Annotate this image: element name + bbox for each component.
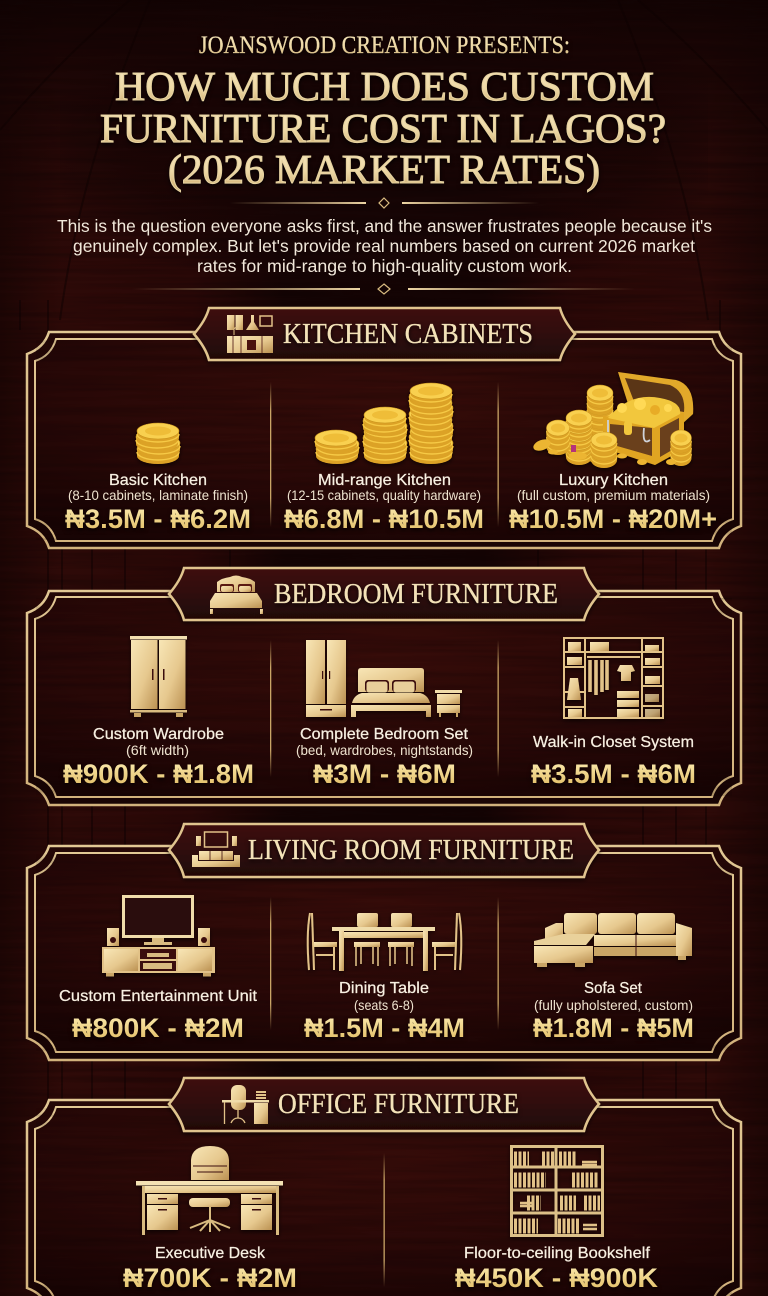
card: mid-range kitchen (284, 383, 484, 534)
intro paragraph: rates for mid-range to high-quality custom work. (197, 256, 572, 276)
card: custom wardrobe: Custom Wardrobe (93, 726, 224, 743)
icon: dining table (308, 913, 461, 971)
card: custom wardrobe (63, 636, 254, 789)
card: entertainment unit (59, 896, 258, 1043)
intro paragraph: genuinely complex. But let's provide real numbers based on current 2026 market (73, 236, 695, 256)
icon: closet (564, 638, 663, 718)
card: walk-in closet: Walk-in Closet System (533, 734, 694, 751)
icon: treasure chest (532, 372, 693, 468)
card: custom wardrobe: ₦900K - ₦1.8M (63, 759, 254, 789)
card: mid-range kitchen: ₦6.8M - ₦10.5M (284, 504, 484, 534)
icon: coin stacks (315, 383, 453, 464)
card: complete bedroom set: ₦3M - ₦6M (313, 759, 456, 789)
icon: office chair and desk (222, 1085, 269, 1124)
card: dining table: (seats 6-8) (354, 997, 414, 1013)
card: dining table: ₦1.5M - ₦4M (304, 1013, 465, 1043)
card: walk-in closet: ₦3.5M - ₦6M (531, 759, 696, 789)
card: luxury kitchen: ₦10.5M - ₦20M+ (509, 504, 717, 534)
icon: tv unit (102, 896, 215, 976)
card: complete bedroom set: Complete Bedroom Set (300, 726, 469, 743)
banner: living room furniture: LIVING ROOM FURNITURE (248, 835, 574, 866)
card: bookshelf: Floor-to-ceiling Bookshelf (464, 1245, 651, 1262)
card: bookshelf (455, 1146, 659, 1293)
icon: bed (210, 576, 263, 614)
banner: office furniture (169, 1078, 599, 1131)
icon: sofa and tv (192, 832, 240, 867)
icon: coins (136, 423, 180, 464)
card: complete bedroom set (296, 640, 473, 789)
card: entertainment unit: Custom Entertainment Unit (59, 988, 258, 1005)
title: FURNITURE COST IN LAGOS? (100, 105, 666, 151)
card: custom wardrobe: (6ft width) (126, 742, 189, 758)
icon: kitchen (227, 315, 273, 353)
title: HOW MUCH DOES CUSTOM (115, 63, 654, 109)
intro paragraph: This is the question everyone asks first, and the answer frustrates people because it's (57, 216, 712, 236)
header (57, 32, 712, 294)
card: sofa set (533, 913, 694, 1043)
card: executive desk (123, 1146, 297, 1293)
card: basic kitchen: ₦3.5M - ₦6.2M (65, 504, 251, 534)
card: executive desk: Executive Desk (155, 1245, 266, 1262)
icon: sectional sofa (534, 913, 692, 967)
card: complete bedroom set: (bed, wardrobes, nightstands) (296, 742, 473, 758)
icon: bedroom set (306, 640, 462, 717)
card: luxury kitchen: (full custom, premium materials) (517, 487, 710, 503)
card: luxury kitchen: Luxury Kitchen (559, 472, 668, 489)
card: mid-range kitchen: (12-15 cabinets, quality hardware) (287, 487, 481, 503)
card: basic kitchen: (8-10 cabinets, laminate finish) (68, 487, 248, 503)
panel: living room furniture (27, 824, 741, 1060)
card: bookshelf: ₦450K - ₦900K (455, 1263, 659, 1293)
banner: living room furniture (169, 824, 599, 877)
panel: office furniture (27, 1078, 741, 1296)
icon: executive desk (136, 1146, 283, 1235)
title: (2026 MARKET RATES) (168, 146, 600, 192)
presenter line: JOANSWOOD CREATION PRESENTS: (199, 32, 570, 59)
card: sofa set: (fully upholstered, custom) (534, 997, 693, 1013)
card: sofa set: ₦1.8M - ₦5M (533, 1013, 694, 1043)
card: executive desk: ₦700K - ₦2M (123, 1263, 297, 1293)
title (100, 63, 666, 192)
panel: bedroom furniture (27, 568, 741, 805)
banner: kitchen cabinets (194, 308, 575, 360)
panel: kitchen cabinets (27, 308, 741, 548)
card: dining table: Dining Table (339, 980, 429, 997)
card: dining table (304, 913, 465, 1043)
card: walk-in closet (531, 638, 696, 789)
banner: kitchen cabinets: KITCHEN CABINETS (283, 319, 533, 350)
icon: bookshelf (512, 1146, 602, 1236)
banner: office furniture: OFFICE FURNITURE (278, 1089, 519, 1120)
card: basic kitchen (65, 423, 251, 534)
card: entertainment unit: ₦800K - ₦2M (72, 1013, 244, 1043)
card: mid-range kitchen: Mid-range Kitchen (318, 472, 451, 489)
banner: bedroom furniture: BEDROOM FURNITURE (274, 579, 558, 610)
card: luxury kitchen (509, 372, 717, 534)
banner: bedroom furniture (169, 568, 599, 620)
intro paragraph (57, 216, 712, 276)
card: basic kitchen: Basic Kitchen (109, 472, 207, 489)
card: sofa set: Sofa Set (584, 980, 643, 997)
icon: wardrobe (130, 636, 187, 717)
